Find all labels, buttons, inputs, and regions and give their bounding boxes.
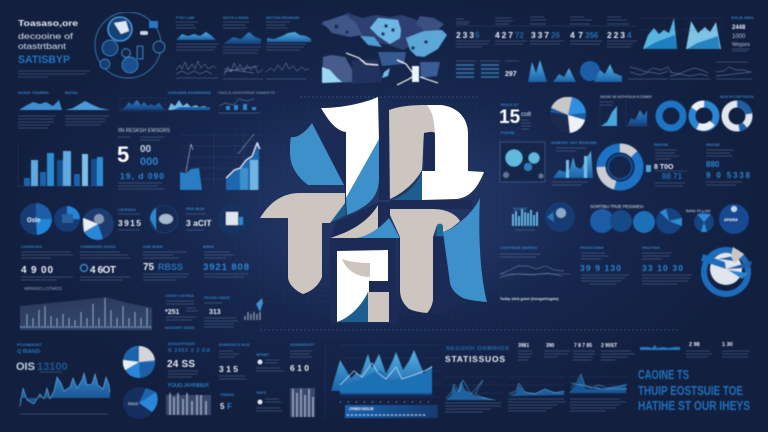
right panel row three pies bbox=[513, 202, 749, 234]
bottom stat columns bbox=[166, 341, 315, 417]
blue facet in numeral one bbox=[346, 139, 379, 215]
dark facet under numeral one bbox=[330, 200, 346, 223]
bars cluster: SUOSE bbox=[513, 206, 527, 211]
statistics heading: STATISSUOS bbox=[445, 354, 505, 364]
panel one: FTIO LIMI bbox=[176, 15, 194, 20]
blue caption strip: JYMIO NOLSI bbox=[349, 407, 373, 411]
stat text columns: 88 71 bbox=[662, 172, 683, 181]
second row left mini charts bbox=[18, 90, 276, 128]
stat columns: 47 bbox=[570, 30, 583, 40]
column three bbox=[256, 352, 284, 411]
exploded donut bbox=[701, 247, 752, 294]
five hundred stat block: 19, d 090 bbox=[120, 171, 164, 181]
column two: 315 bbox=[219, 364, 238, 374]
column one: 24 SS bbox=[167, 359, 195, 370]
pie group: Ballas 90 y mte bbox=[686, 209, 711, 213]
stat text columns: SNOSE bbox=[706, 142, 720, 147]
paired area charts bbox=[600, 95, 653, 126]
stat columns: 233 bbox=[456, 30, 474, 40]
top right stat row bbox=[456, 15, 754, 51]
side figures: Wegses bbox=[732, 42, 750, 48]
column four: SCRSNSOFT bbox=[290, 342, 315, 347]
column four: 610 bbox=[290, 363, 309, 373]
stat columns: 356 bbox=[585, 31, 599, 40]
bottom right figures row bbox=[518, 342, 750, 360]
five hundred stat block: 000 bbox=[140, 156, 158, 168]
legend table bbox=[456, 61, 519, 78]
stat pan ibja: PAN IBJA bbox=[186, 206, 204, 211]
stat liksga bbox=[118, 207, 141, 230]
column four bbox=[290, 342, 315, 417]
bottom right figures row: 3981 bbox=[518, 343, 529, 349]
bottom right blue headline: THUIP EOSTSUIE TOE bbox=[638, 384, 743, 398]
beige swoosh bbox=[342, 259, 370, 277]
chart d: DSNOMIS ASSERNINS bbox=[168, 90, 211, 95]
big fifteen stat: colt bbox=[521, 111, 531, 118]
wide histogram bbox=[20, 286, 152, 330]
stat text columns bbox=[654, 142, 751, 186]
stat one: 4 9 00 bbox=[21, 265, 53, 276]
stat two bbox=[80, 244, 130, 280]
paired area charts: SAONO SE MOTHTALIA PLOSMER bbox=[600, 95, 653, 99]
continue margin chart bbox=[500, 245, 570, 277]
row four left stats bbox=[21, 244, 249, 280]
title block bbox=[18, 18, 90, 77]
title block: decooine of bbox=[18, 31, 74, 41]
title block: SATISBYP bbox=[18, 54, 70, 66]
pie two bbox=[54, 206, 80, 232]
panel alpha: *251 bbox=[165, 309, 180, 316]
dual line chart bbox=[180, 132, 262, 190]
bottom right figures row: 1 30 bbox=[722, 342, 733, 348]
column two: TSEISS bbox=[220, 392, 235, 397]
program stat bbox=[580, 245, 629, 284]
column two bbox=[219, 342, 250, 411]
title block: Toasaso,ore bbox=[18, 18, 78, 28]
column three: SPRET bbox=[256, 352, 270, 357]
stat two: 4 6OT bbox=[90, 265, 116, 276]
second right row small charts bbox=[456, 60, 752, 82]
right panel row two bbox=[500, 140, 751, 186]
patnia stat: PAOTNIA bbox=[642, 245, 660, 250]
bottom left chart: Q BIAND bbox=[17, 349, 40, 355]
bottom left chart bbox=[16, 342, 110, 414]
stat columns: 337 bbox=[531, 30, 549, 40]
five hundred stat block: 00 bbox=[140, 144, 152, 155]
stat two: COMMUNIS DUISA bbox=[80, 244, 116, 249]
blue bar area chart bbox=[551, 140, 597, 185]
blue caption strip bbox=[345, 405, 438, 418]
stat three: 75 bbox=[143, 262, 155, 273]
bottom right line charts bbox=[445, 374, 628, 412]
stat columns: 72 bbox=[515, 31, 524, 40]
bottom left chart: PCUSBSCET bbox=[17, 342, 42, 347]
dark blue corner bbox=[337, 292, 368, 322]
teal facet of D bbox=[392, 172, 422, 200]
big area chart bbox=[325, 345, 440, 420]
patnia stat bbox=[642, 245, 692, 284]
stat three bbox=[143, 244, 189, 280]
column three: TAFS bbox=[256, 390, 266, 395]
chart b bbox=[65, 90, 110, 125]
stat text columns: 880 bbox=[706, 160, 720, 169]
stat liksga: 3915 bbox=[118, 218, 141, 228]
right panel row one bbox=[499, 94, 754, 135]
big fifteen stat: ROLE SJ bbox=[501, 102, 518, 107]
stat four: 3921 808 bbox=[203, 262, 249, 273]
line chart a bbox=[445, 377, 502, 412]
stat one: CAISNOSA bbox=[21, 244, 42, 249]
panel gamma histogram bbox=[245, 298, 263, 320]
left blue wing bbox=[290, 123, 344, 185]
column one: SOAUSTOSAT bbox=[168, 341, 196, 346]
panel beta: PSTAS ONUS bbox=[204, 295, 230, 300]
chart b: BIOSA bbox=[65, 90, 78, 95]
stat one bbox=[21, 244, 73, 280]
beige block bbox=[368, 292, 389, 322]
chart e: FMOLLE NOSSTERSAT ISAMEATTE bbox=[218, 91, 276, 95]
program stat: PROGOSMA bbox=[580, 245, 604, 250]
stat columns bbox=[456, 17, 637, 47]
bottom right blue headline bbox=[638, 368, 750, 413]
side figures: 2448 bbox=[732, 25, 746, 31]
tiny line chart bbox=[640, 345, 680, 350]
chart d bbox=[168, 90, 211, 110]
bottom left chart: OIS bbox=[16, 361, 35, 373]
pie group: SOIRTIBU TRIJE PESSMEIA bbox=[590, 204, 644, 209]
panel alpha: CAVIO CATMIA bbox=[165, 293, 194, 298]
bars cluster bbox=[513, 206, 537, 230]
beige small triangle bbox=[330, 205, 378, 238]
big fifteen stat bbox=[499, 102, 531, 135]
bottom left chart: 13100 bbox=[37, 361, 68, 373]
column two: 5 bbox=[220, 402, 225, 411]
right panel row four: Today slink.gown (Inongo/Uogsto) bbox=[500, 297, 559, 301]
right panel row one: NUS PCTATTAITA bbox=[720, 94, 754, 99]
bottom right figures row: 2 98 bbox=[689, 342, 700, 348]
large donut bbox=[601, 148, 639, 186]
panel alpha bbox=[165, 293, 198, 330]
mini panels top row bbox=[176, 15, 311, 79]
white square glyph bbox=[337, 250, 388, 322]
stat columns: 4 bbox=[627, 31, 632, 40]
side figures: 1000 bbox=[732, 34, 746, 40]
stat four bbox=[203, 244, 249, 277]
stat four: BIMIS bbox=[203, 244, 214, 249]
patnia stat: 33 10 30 bbox=[642, 263, 683, 273]
bubble diagram box bbox=[500, 142, 545, 182]
column one: N 2453 3 3 DA bbox=[168, 348, 210, 354]
wide histogram: WRNISO LOTMOS bbox=[24, 286, 62, 291]
statistics heading bbox=[445, 346, 509, 364]
line chart c bbox=[569, 374, 628, 411]
chart c bbox=[120, 98, 166, 111]
right blue wing bbox=[443, 198, 487, 302]
dark dial with chart bbox=[217, 203, 251, 237]
column two: F bbox=[227, 402, 232, 411]
chart a bbox=[18, 90, 62, 128]
five hundred stat block bbox=[117, 128, 171, 189]
stat pan ibja bbox=[186, 206, 212, 230]
small stat panels middle bbox=[165, 293, 263, 330]
line chart b bbox=[508, 377, 566, 411]
blue triangle bbox=[357, 218, 400, 238]
left bar chart bbox=[18, 145, 106, 186]
thin line charts bbox=[628, 62, 752, 79]
side figures bbox=[731, 15, 754, 51]
bottom pies bbox=[123, 346, 158, 419]
column one bbox=[166, 341, 211, 415]
central monogram logo bbox=[260, 97, 487, 324]
statistics heading: NEGSIOI GNMNIOS bbox=[446, 346, 509, 352]
stat text columns: 8 T0O bbox=[654, 164, 674, 171]
big fifteen stat: 15 bbox=[499, 107, 521, 128]
bottom right figures row: 390 bbox=[546, 343, 555, 349]
stat three: USE BIAM bbox=[143, 244, 163, 249]
circular icon cluster bbox=[95, 12, 165, 78]
panel alpha: DOSONT SNSS bbox=[165, 325, 194, 330]
pie group: AFARA bbox=[724, 217, 738, 222]
pie lower: SOUS bbox=[128, 402, 139, 406]
beige T shape bbox=[260, 193, 345, 294]
beige stem of D bbox=[389, 105, 435, 199]
stat columns: 5 bbox=[475, 31, 480, 40]
legend table: 297 bbox=[505, 71, 517, 78]
title block: otastrtbant bbox=[18, 41, 67, 51]
beige R stem bbox=[390, 209, 460, 313]
panel beta bbox=[204, 295, 238, 327]
white bowl of D bbox=[422, 105, 484, 200]
pie chart bbox=[550, 97, 586, 133]
five hundred stat block: 5 bbox=[117, 142, 129, 167]
bottom right blue headline: CAOINE TS bbox=[638, 368, 689, 382]
stat pan ibja: 3 aCIT bbox=[186, 218, 212, 228]
stat text columns: SNOSE bbox=[654, 142, 668, 147]
big fifteen stat: FOUSE bbox=[501, 130, 515, 135]
logo shadow bbox=[312, 100, 472, 324]
globe dial bbox=[150, 205, 178, 233]
pie one bbox=[20, 203, 52, 235]
satellite map illustration bbox=[320, 13, 447, 85]
blue bar area chart: SOMONT UST RESIONS bbox=[551, 140, 597, 145]
five hundred stat block: IIN RESKSH EWSGRS bbox=[118, 128, 171, 134]
stat columns: 427 bbox=[495, 30, 513, 40]
pie three bbox=[82, 208, 114, 240]
column one: YOUD J4 RNBER bbox=[167, 383, 210, 389]
continue margin chart: CONTINUE MARGA bbox=[500, 245, 537, 250]
bottom right figures row: 2 90ST bbox=[601, 343, 617, 349]
twin mountain charts bbox=[640, 18, 723, 49]
pie upper bbox=[123, 346, 155, 378]
magnifier pie bbox=[545, 202, 575, 232]
stat liksga: LIKRSGA bbox=[118, 207, 136, 212]
numeral one white bbox=[321, 97, 379, 198]
pie one: Oslo bbox=[27, 218, 41, 224]
program stat: 39 9 130 bbox=[580, 263, 621, 273]
donut rings bbox=[659, 104, 749, 128]
panel beta: 313 bbox=[209, 309, 221, 316]
row three left circles bbox=[20, 203, 251, 240]
column two: EURIONCS RCE bbox=[219, 342, 250, 347]
panel three: SIOTAN RESSUM bbox=[266, 15, 300, 20]
teal notch bbox=[436, 224, 443, 236]
chart a: DSAIO TEAMRA bbox=[18, 90, 49, 95]
right panel row four bbox=[500, 245, 752, 301]
stat columns: 223 bbox=[607, 30, 625, 40]
stat three: RBSS bbox=[158, 262, 183, 272]
stat text columns: 9 0 5338 bbox=[706, 171, 751, 180]
bottom right figures row: 7 8 7 85 bbox=[574, 343, 592, 349]
panel two: NOTA LOSKS bbox=[223, 15, 249, 20]
lightning bbox=[346, 53, 438, 85]
pie group bbox=[590, 204, 749, 234]
chart e bbox=[218, 91, 276, 113]
stat columns: 26 bbox=[551, 31, 560, 40]
side figures: SOLIE NISS bbox=[731, 15, 754, 20]
blue peaks bbox=[528, 60, 622, 82]
